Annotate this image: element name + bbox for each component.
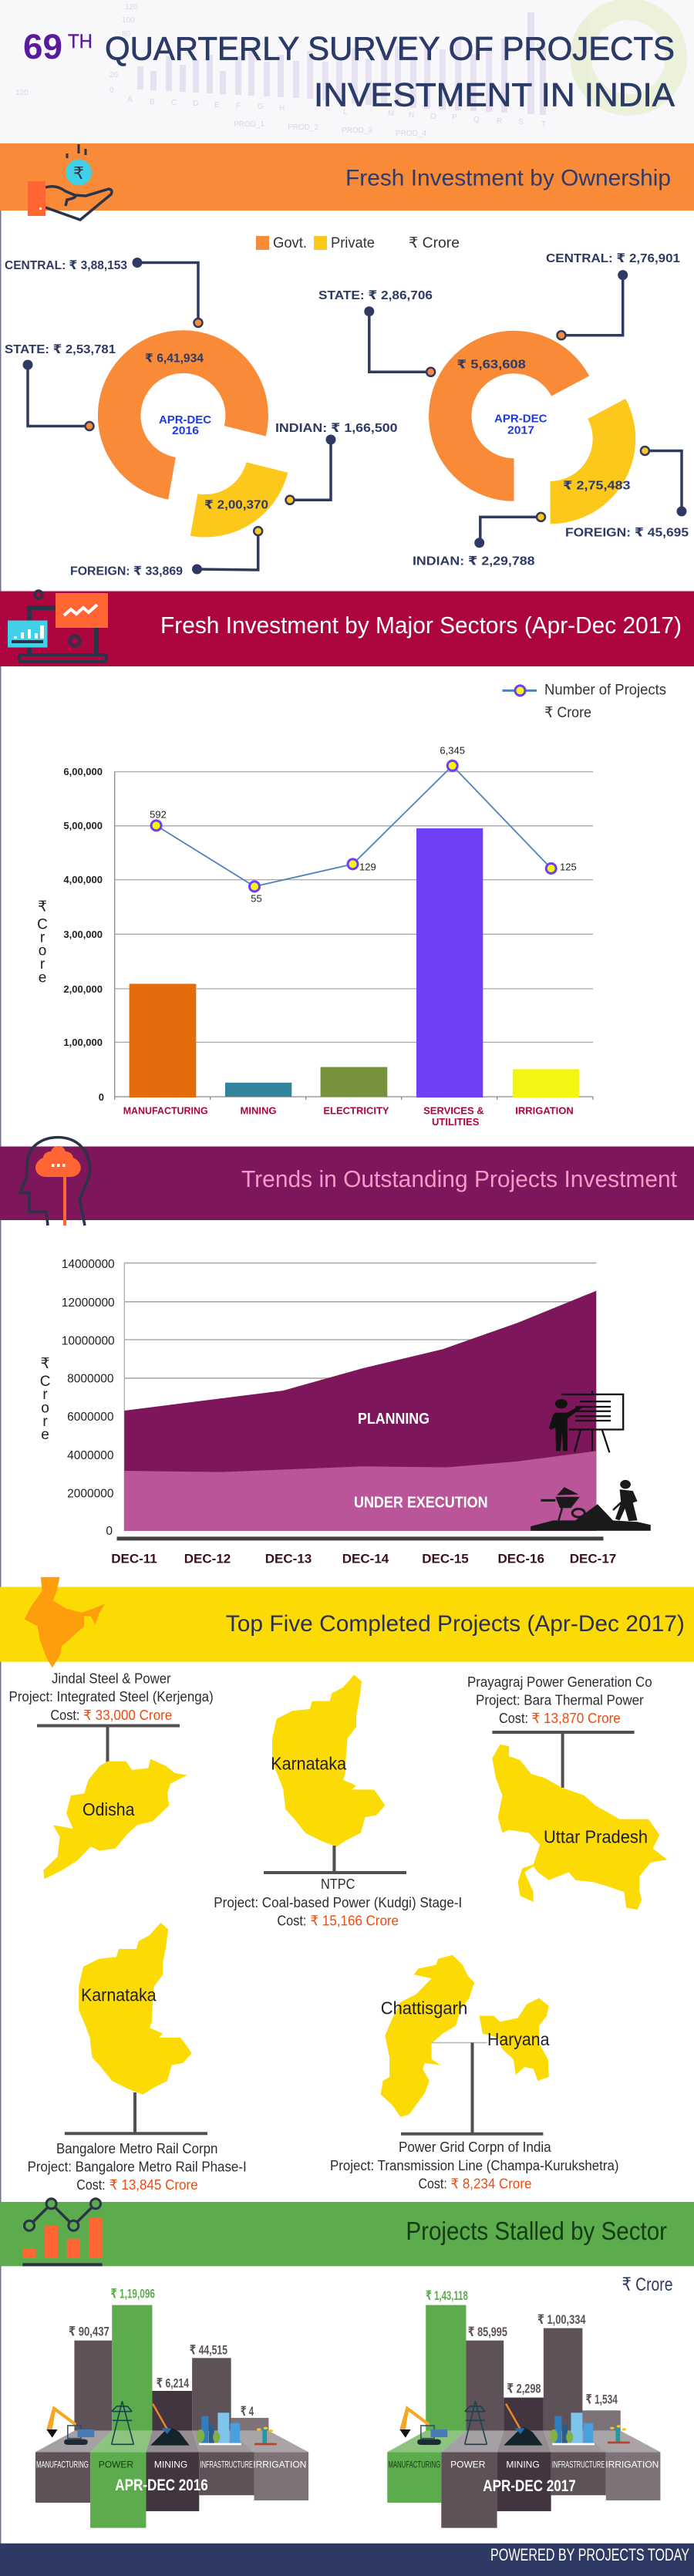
section band: ownership: Fresh Investment by Ownership — [345, 165, 671, 191]
line: number of projects: 125 — [560, 861, 577, 873]
axis labels: 12000000 — [62, 1296, 115, 1310]
project: NTPC, Karnataka: Karnataka — [271, 1754, 346, 1774]
section band: stalled projects: Projects Stalled by Sector — [406, 2217, 667, 2245]
icon: transmission tower — [465, 2401, 487, 2444]
project: Jindal Steel, Odisha: ₹ 33,000 Crore — [83, 1708, 172, 1723]
background faint chart: N — [409, 111, 414, 120]
date labels: DEC-14 — [342, 1552, 389, 1566]
donut chart: Apr-Dec 2016: 2016 — [172, 424, 199, 437]
labels 2016: ₹ 90,437 — [69, 2325, 109, 2338]
category labels: UTILITIES — [432, 1116, 480, 1128]
icon: irrigation sprinkler — [254, 2427, 277, 2445]
axis labels: 14000000 — [62, 1258, 115, 1271]
labels 2016: ₹ 1,19,096 — [111, 2286, 155, 2301]
callout: central 2016 — [5, 258, 202, 327]
donut chart: Apr-Dec 2016: ₹ 6,41,934 — [145, 352, 204, 366]
y axis title: ₹ — [38, 899, 47, 915]
donut chart: Apr-Dec 2017 — [318, 252, 689, 568]
axis labels: 2000000 — [67, 1487, 114, 1501]
project: Prayagraj Power, Uttar Pradesh — [467, 1674, 668, 1910]
labels 2017: APR-DEC 2017 — [483, 2477, 576, 2495]
background faint chart: 0 — [109, 86, 114, 95]
axis labels: 8000000 — [67, 1373, 114, 1385]
donut chart: Apr-Dec 2016: ₹ 2,00,370 — [204, 498, 268, 512]
callout: foreign 2017: FOREIGN: ₹ 45,695 — [565, 526, 689, 540]
y axis labels: 3,00,000 — [63, 929, 103, 940]
labels 2017 — [388, 2288, 659, 2495]
area: planning — [124, 1291, 596, 1531]
footer — [0, 2544, 694, 2576]
background faint chart: S — [518, 118, 524, 126]
project: Prayagraj Power, Uttar Pradesh: Project: Bara Thermal Power — [476, 1692, 644, 1708]
donut chart: Apr-Dec 2017: ₹ 5,63,608 — [456, 358, 526, 372]
legend: ownership: Private — [331, 235, 375, 251]
project: Power Grid, Chattisgarh and Haryana: Power Grid Corpn of India — [399, 2139, 552, 2155]
icon: city buildings — [550, 2399, 595, 2445]
title — [23, 27, 675, 114]
background faint chart: 120 — [15, 89, 29, 97]
axis labels: 4000000 — [67, 1449, 114, 1462]
category labels: IRRIGATION — [515, 1104, 574, 1117]
icon: hand holding rupee coin — [28, 144, 112, 220]
combo chart: sectors — [37, 745, 593, 1128]
project: NTPC, Karnataka: Cost: — [277, 1913, 306, 1928]
icon: excavator — [46, 2406, 94, 2445]
y axis title: e — [39, 970, 46, 986]
donut chart: Apr-Dec 2017: 2017 — [507, 424, 534, 437]
labels 2017: POWER — [450, 2459, 486, 2470]
labels 2016 — [36, 2286, 306, 2494]
background faint chart: R — [497, 117, 502, 126]
labels 2017: MINING — [506, 2459, 540, 2470]
y axis title: r — [42, 1414, 48, 1430]
axis labels: 6000000 — [67, 1411, 114, 1424]
labels 2017: MANUFACTURING — [388, 2459, 440, 2470]
background faint chart: 120 — [125, 3, 138, 12]
icon: rising bar and line chart — [22, 2199, 103, 2266]
panel: top five completed projects — [0, 1577, 694, 2193]
project: Bangalore Metro, Karnataka: ₹ 13,845 Crore — [109, 2177, 198, 2193]
icon: city buildings — [197, 2399, 241, 2445]
icon: presenter at board — [549, 1391, 623, 1452]
y axis title: r — [40, 956, 45, 973]
background faint chart: G — [258, 103, 264, 111]
y axis labels: 0 — [99, 1091, 104, 1103]
donut chart: Apr-Dec 2017: APR-DEC — [494, 412, 547, 426]
y axis labels: 5,00,000 — [63, 820, 103, 831]
project: Bangalore Metro, Karnataka: Project: Bangalore Metro Rail Phase-I — [28, 2160, 247, 2175]
labels 2016: ₹ 6,214 — [157, 2375, 189, 2391]
icon: head with idea tree — [20, 1138, 89, 1226]
project: Power Grid, Chattisgarh and Haryana: Haryana — [487, 2029, 550, 2049]
title: QUARTERLY SURVEY OF PROJECTS — [105, 31, 675, 68]
line: number of projects — [150, 745, 577, 904]
bars — [130, 828, 579, 1097]
project: Jindal Steel, Odisha — [9, 1671, 214, 1879]
title: 69 — [23, 27, 62, 66]
callout: state 2017 — [318, 289, 435, 376]
category labels: MANUFACTURING — [123, 1104, 208, 1117]
title: TH — [68, 31, 93, 52]
legend: ownership: ₹ Crore — [409, 235, 460, 251]
donut chart: Apr-Dec 2016: APR-DEC — [159, 413, 211, 427]
date labels: DEC-13 — [265, 1552, 312, 1566]
background faint chart: Q — [473, 116, 480, 124]
y axis labels: 1,00,000 — [63, 1037, 103, 1048]
project: NTPC, Karnataka: ₹ 15,166 Crore — [310, 1913, 399, 1928]
callout: indian 2016 — [275, 422, 398, 504]
icon: hand holding rupee coin: ₹ — [73, 164, 84, 183]
icon: construction worker and wheelbarrow — [531, 1480, 651, 1531]
callout: central 2017 — [546, 252, 680, 339]
background faint chart: E — [214, 101, 220, 110]
legend: sectors: Number of Projects — [544, 682, 666, 699]
background faint chart: H — [279, 104, 285, 113]
panel: fresh investment by ownership — [0, 143, 694, 578]
project: NTPC, Karnataka: Project: Coal-based Power (Kudgi) Stage-I — [214, 1895, 462, 1910]
y axis title: r — [42, 1387, 48, 1403]
callout: foreign 2017 — [565, 447, 689, 540]
section band: ownership — [0, 143, 694, 211]
axis labels — [62, 1258, 115, 1538]
labels 2017: ₹ 85,995 — [468, 2325, 507, 2339]
y axis labels: 4,00,000 — [63, 874, 103, 885]
line: number of projects: 6,345 — [440, 745, 465, 756]
section band: sectors: Fresh Investment by Major Sectors (Apr-Dec 2017) — [160, 612, 682, 639]
icon: coal pile with shovel — [150, 2404, 190, 2446]
category labels — [123, 1104, 574, 1128]
labels 2017: ₹ 2,298 — [507, 2382, 541, 2396]
callout: state 2016: STATE: ₹ 2,53,781 — [5, 343, 116, 356]
background faint chart: B — [150, 98, 155, 106]
y axis title: ₹ — [41, 1356, 50, 1372]
background faint chart: PROD_4 — [396, 130, 426, 138]
section band: trends — [0, 1146, 694, 1220]
axis labels: 0 — [106, 1525, 113, 1538]
project: Prayagraj Power, Uttar Pradesh: ₹ 13,870 Crore — [531, 1711, 621, 1726]
callout: state 2016 — [5, 343, 116, 430]
background faint chart: F — [236, 102, 241, 110]
icons row 2016 — [46, 2399, 277, 2446]
icon: coal pile with shovel — [504, 2404, 543, 2446]
bars and platform 2017 — [387, 2305, 660, 2528]
area: planning: PLANNING — [358, 1411, 430, 1428]
project: Prayagraj Power, Uttar Pradesh: Uttar Pradesh — [544, 1826, 648, 1846]
labels 2016: APR-DEC 2016 — [115, 2477, 208, 2494]
callout: central 2016: CENTRAL: ₹ 3,88,153 — [5, 259, 127, 272]
y axis labels: 6,00,000 — [63, 766, 103, 777]
project: Bangalore Metro, Karnataka — [28, 1923, 247, 2193]
line: number of projects: 129 — [359, 861, 376, 873]
legend: sectors: ₹ Crore — [544, 705, 591, 721]
project: Jindal Steel, Odisha: Jindal Steel & Power — [52, 1671, 171, 1686]
donut chart: Apr-Dec 2017: ₹ 2,75,483 — [563, 480, 631, 492]
axis labels: 10000000 — [62, 1334, 115, 1348]
labels 2017: ₹ 1,00,334 — [537, 2312, 586, 2327]
callout: central 2017: CENTRAL: ₹ 2,76,901 — [546, 252, 680, 265]
background faint chart: PROD_2 — [288, 123, 318, 132]
background faint chart: PROD_3 — [342, 126, 372, 135]
background faint chart: O — [430, 113, 436, 121]
icons row 2017 — [399, 2399, 630, 2446]
date labels: DEC-17 — [570, 1552, 616, 1566]
background faint chart: M — [388, 110, 394, 118]
background faint chart: 20 — [109, 71, 119, 79]
date labels: DEC-15 — [422, 1552, 469, 1566]
unit label: ₹ Crore — [622, 2274, 672, 2295]
project: Power Grid, Chattisgarh and Haryana — [330, 1955, 618, 2192]
background faint chart: 100 — [122, 16, 135, 25]
callout: indian 2017: INDIAN: ₹ 2,29,788 — [413, 555, 535, 568]
icon: transmission tower — [112, 2401, 133, 2444]
line: number of projects: 592 — [150, 808, 167, 821]
project: Prayagraj Power, Uttar Pradesh: Cost: — [499, 1711, 528, 1726]
y axis title — [37, 899, 48, 986]
section band: stalled projects — [0, 2202, 694, 2266]
callout: indian 2017 — [413, 513, 545, 568]
callout: foreign 2016: FOREIGN: ₹ 33,869 — [70, 565, 183, 578]
panel: fresh investment by major sectors — [0, 591, 694, 1128]
background faint chart: D — [193, 99, 198, 108]
date labels: DEC-11 — [111, 1552, 157, 1566]
project: Bangalore Metro, Karnataka: Karnataka — [81, 1985, 157, 2005]
date labels: DEC-16 — [497, 1552, 544, 1566]
labels 2017: IRRIGATION — [605, 2459, 659, 2470]
labels 2016: POWER — [99, 2459, 133, 2470]
project: NTPC, Karnataka — [214, 1674, 462, 1928]
bars and platform 2016 — [35, 2305, 308, 2528]
section band: sectors — [0, 591, 694, 666]
line: number of projects: 55 — [251, 893, 262, 904]
icon: laptop with charts — [8, 591, 108, 662]
project: Power Grid, Chattisgarh and Haryana: ₹ 8,234 Crore — [450, 2176, 531, 2192]
project: Bangalore Metro, Karnataka: Bangalore Metro Rail Corpn — [56, 2141, 217, 2156]
background faint chart: C — [171, 99, 177, 107]
labels 2017: ₹ 1,534 — [586, 2392, 618, 2406]
donut chart: Apr-Dec 2016 — [5, 258, 398, 578]
background faint chart: P — [452, 113, 457, 122]
y axis title: e — [41, 1427, 49, 1443]
panel: trends in outstanding projects investment — [0, 1138, 694, 1566]
project: Jindal Steel, Odisha: Project: Integrated Steel (Kerjenga) — [9, 1689, 214, 1704]
category labels: ELECTRICITY — [323, 1104, 389, 1117]
y axis labels — [63, 766, 104, 1103]
section band: trends: Trends in Outstanding Projects Investment — [241, 1165, 677, 1192]
labels 2016: ₹ 44,515 — [190, 2343, 227, 2357]
y axis title: o — [41, 1401, 49, 1416]
icon: India map — [25, 1577, 105, 1667]
y axis title: C — [40, 1374, 50, 1390]
labels 2016: IRRIGATION — [253, 2459, 306, 2470]
legend: ownership — [256, 235, 460, 251]
callout: state 2017: STATE: ₹ 2,86,706 — [318, 289, 433, 302]
background faint chart: A — [127, 96, 133, 104]
background faint chart: L — [343, 108, 348, 116]
callout: foreign 2016 — [70, 527, 262, 578]
header panel — [0, 0, 694, 143]
legend: sectors — [503, 682, 666, 721]
project: Bangalore Metro, Karnataka: Cost: — [76, 2177, 106, 2193]
legend: ownership: Govt. — [273, 235, 307, 251]
panel: projects stalled by sector — [0, 2199, 694, 2528]
labels 2016: MANUFACTURING — [36, 2459, 89, 2470]
area: under execution: UNDER EXECUTION — [354, 1495, 488, 1512]
stalled chart: Apr-Dec 2016 — [35, 2286, 308, 2528]
icon: irrigation sprinkler — [608, 2425, 630, 2443]
project: Prayagraj Power, Uttar Pradesh: Prayagraj Power Generation Co — [467, 1674, 652, 1690]
date labels — [111, 1552, 616, 1566]
labels 2016: INFRASTRUCTURE — [200, 2459, 253, 2470]
area: under execution — [124, 1451, 596, 1531]
date labels: DEC-12 — [184, 1552, 231, 1566]
project: Power Grid, Chattisgarh and Haryana: Chattisgarh — [381, 1998, 467, 2018]
background faint chart: 80 — [122, 30, 131, 39]
area chart: outstanding investment — [40, 1258, 616, 1566]
labels 2017: INFRASTRUCTURE — [552, 2459, 605, 2470]
category labels: MINING — [241, 1104, 276, 1117]
labels 2017: ₹ 1,43,118 — [426, 2288, 468, 2303]
project: NTPC, Karnataka: NTPC — [321, 1876, 355, 1892]
y axis labels: 2,00,000 — [63, 983, 103, 995]
background faint chart — [15, 3, 676, 138]
callout: indian 2016: INDIAN: ₹ 1,66,500 — [275, 422, 398, 435]
y axis title: C — [37, 916, 48, 933]
section band: completed projects: Top Five Completed Projects (Apr-Dec 2017) — [226, 1611, 685, 1637]
y axis title: o — [39, 942, 46, 959]
section band: completed projects — [0, 1587, 694, 1662]
category labels: SERVICES & — [423, 1104, 484, 1117]
title: INVESTMENT IN INDIA — [314, 77, 675, 114]
project: Power Grid, Chattisgarh and Haryana: Cost: — [418, 2176, 447, 2192]
project: Jindal Steel, Odisha: Odisha — [83, 1799, 135, 1819]
labels 2016: MINING — [154, 2459, 187, 2470]
icon: excavator — [399, 2406, 447, 2445]
y axis title: r — [40, 930, 45, 946]
project: Jindal Steel, Odisha: Cost: — [50, 1708, 79, 1723]
stalled chart: Apr-Dec 2017 — [387, 2288, 660, 2528]
y axis title — [40, 1356, 50, 1443]
background faint chart: T — [541, 120, 546, 129]
labels 2016: ₹ 4 — [241, 2404, 254, 2419]
background faint chart: PROD_1 — [234, 120, 264, 129]
project: Power Grid, Chattisgarh and Haryana: Project: Transmission Line (Champa-Kurukshetra) — [330, 2158, 618, 2173]
